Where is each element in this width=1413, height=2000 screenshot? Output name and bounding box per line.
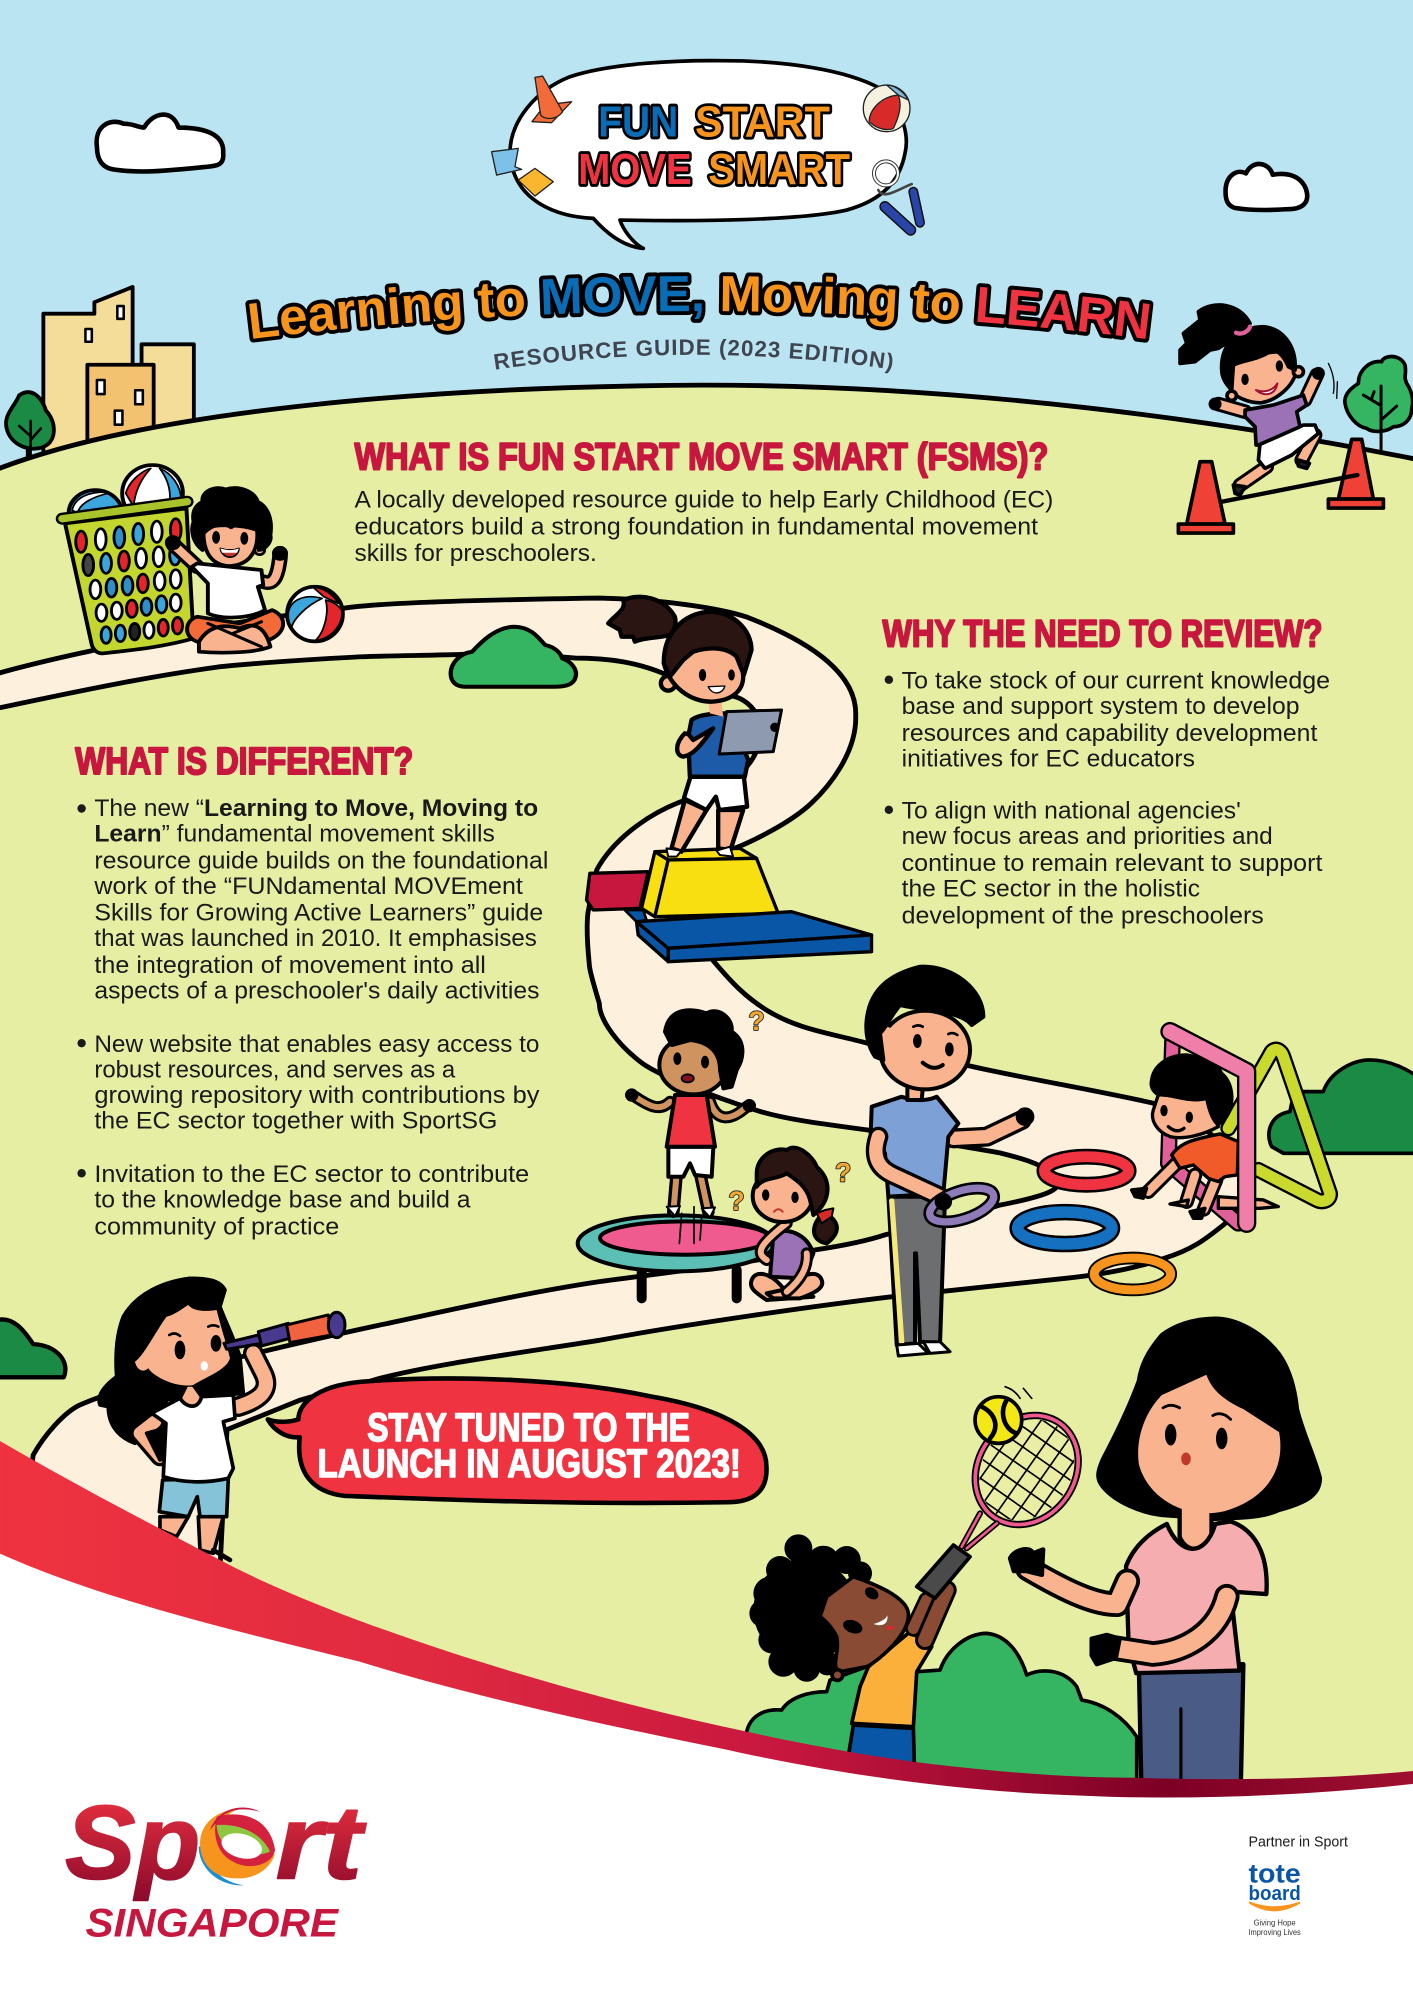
tagline: Giving Hope [1254, 1919, 1296, 1928]
tree left [6, 392, 54, 462]
logo: sport singapore [65, 1784, 367, 1945]
bullet one: work of the “FUNdamental MOVEment [93, 873, 523, 899]
teacher neck and head [907, 1082, 923, 1100]
logo text: move smart [578, 145, 850, 194]
bullet three: community of practice [94, 1213, 339, 1239]
logo text: move smart: MOVE [578, 145, 692, 194]
bullet one: Skills for Growing Active Learners” guide [94, 900, 543, 926]
face [1232, 352, 1297, 403]
hair [99, 1278, 243, 1443]
balls in basket [69, 465, 183, 537]
teacher right arm [953, 1120, 1022, 1138]
face [135, 1305, 230, 1386]
legs [672, 800, 707, 852]
blue crescent [199, 1843, 244, 1885]
face [1138, 1375, 1280, 1513]
top swish [210, 1807, 260, 1830]
bullet three: Invitation to the EC sector to contribute [94, 1161, 529, 1187]
orange band [200, 1808, 275, 1878]
blue ring [1018, 1212, 1112, 1244]
logo: partner in sport tote board [1248, 1835, 1348, 1937]
callout bubble [268, 1378, 767, 1503]
neck [1180, 1502, 1212, 1549]
hands [1010, 1549, 1120, 1664]
face details [212, 531, 220, 544]
bullet one: initiatives for EC educators [902, 745, 1195, 771]
hands [167, 537, 179, 548]
wordmark rt: rt [275, 1784, 367, 1901]
teacher shirt [871, 1097, 958, 1197]
pink frame front [1170, 1032, 1247, 1223]
child front leg [1187, 1175, 1195, 1202]
red band [215, 1814, 275, 1866]
child back leg [1218, 1197, 1278, 1208]
heading: WHAT IS DIFFERENT? [75, 740, 413, 783]
section: what is fsms [355, 435, 1053, 566]
bullet one: To take stock of our current knowledge [902, 668, 1330, 694]
floor rings [1018, 1157, 1171, 1290]
seated girl head [753, 1170, 813, 1222]
arms [174, 545, 280, 583]
neck [180, 1385, 202, 1406]
logo text: fun start: FUN [598, 98, 678, 147]
left cone [1178, 462, 1233, 533]
callout: stay tuned [268, 1378, 767, 1503]
arm holding [1112, 1597, 1227, 1654]
shoes [667, 848, 682, 857]
teacher right hand [1018, 1109, 1032, 1124]
section: why the need to review [882, 613, 1330, 928]
body text [355, 487, 1053, 566]
bullet two: development of the preschoolers [902, 902, 1264, 928]
smile [1250, 1903, 1299, 1910]
skirt [1258, 425, 1318, 468]
callout text [318, 1406, 741, 1486]
face [820, 1577, 908, 1672]
scrunchie [1236, 327, 1250, 333]
shirt [688, 713, 748, 777]
partner label: Partner in Sport [1248, 1835, 1348, 1851]
motion lines [1328, 363, 1337, 398]
yellow block [642, 848, 778, 917]
shorts [187, 610, 283, 642]
seated girl pigtail [814, 1215, 837, 1243]
purple hoop [926, 1181, 998, 1229]
face details [1241, 374, 1249, 385]
racket grip [917, 1545, 970, 1598]
shirt [1245, 395, 1307, 445]
icon: beach ball [863, 85, 910, 132]
shirt [852, 1632, 932, 1727]
sky background [0, 0, 1413, 536]
teacher shoes [897, 1342, 950, 1356]
shorts [159, 1478, 228, 1517]
section: what is different [75, 740, 548, 1239]
logo text: move smart: SMART [708, 145, 850, 194]
seated girl arms [761, 1223, 807, 1292]
tennis ball [975, 1387, 1032, 1443]
left arm [140, 1422, 160, 1457]
boy shoes [667, 1206, 715, 1217]
hair [749, 1534, 872, 1682]
face details [699, 669, 706, 681]
bullet one: Learn” fundamental movement skills [94, 821, 495, 847]
hair [664, 612, 752, 677]
racket throat [962, 1513, 997, 1548]
face features [1165, 1424, 1176, 1446]
tree right [1345, 356, 1413, 453]
racket head [972, 1412, 1082, 1528]
red ring [1044, 1157, 1129, 1185]
body text: educators build a strong foundation in fundamental movement [355, 513, 1039, 539]
board wordmark: board [1248, 1883, 1301, 1905]
tagline: Improving Lives [1248, 1928, 1301, 1937]
question mark right: ? [835, 1158, 851, 1188]
child arms [1148, 1163, 1216, 1209]
callout text: STAY TUNED TO THE [367, 1406, 690, 1450]
bullet three [77, 1161, 529, 1239]
child face [1152, 1095, 1218, 1138]
icon: yellow bean bag [518, 168, 553, 196]
red block [587, 872, 648, 910]
arm out [1028, 1569, 1127, 1604]
gym blocks and girl with tablet [587, 597, 872, 962]
ponytail [608, 597, 675, 642]
crossed legs [199, 626, 270, 653]
boy arms [635, 1097, 747, 1117]
boy vest [667, 1095, 715, 1147]
callout text: LAUNCH IN AUGUST 2023! [318, 1442, 741, 1486]
child features [1160, 1105, 1168, 1116]
cloud left [97, 115, 223, 172]
neck and arm [708, 702, 723, 717]
subtitle: resource guide: RESOURCE GUIDE (2023 EDITION) [494, 338, 892, 374]
trampoline [578, 1207, 774, 1298]
shirt [192, 563, 265, 617]
hands [1210, 399, 1220, 409]
small blue ledge [625, 910, 647, 922]
bullet two: To align with national agencies' [902, 798, 1241, 824]
bullet two [77, 1031, 540, 1134]
boy shorts [668, 1147, 713, 1177]
winding path [0, 598, 1243, 1581]
boy hands [627, 1090, 636, 1100]
icon: blue bean bag [492, 148, 522, 175]
white footer [0, 1551, 1413, 2000]
logo: fun start move smart speech bubble [492, 61, 920, 248]
green inner [217, 1825, 270, 1854]
question mark: ? [748, 1006, 765, 1036]
white hole [219, 1829, 265, 1863]
bullet one: resource guide builds on the foundational [94, 847, 548, 873]
bullet one: that was launched in 2010. It emphasises [94, 925, 537, 951]
red swoosh [0, 1437, 1413, 2000]
character: boy with basket of balls [62, 465, 343, 653]
boy legs [673, 1173, 708, 1212]
shirt [152, 1395, 235, 1482]
icon: cone [532, 76, 572, 123]
tote wordmark: tote [1248, 1858, 1301, 1888]
bullet two: New website that enables easy access to [94, 1031, 539, 1057]
orange ring [1094, 1258, 1171, 1290]
speech bubble [510, 61, 906, 248]
arms [913, 1590, 947, 1640]
tagline [1248, 1919, 1301, 1937]
bullet two: new focus areas and priorities and [902, 823, 1273, 849]
seated girl legs [751, 1274, 813, 1300]
bullet one: The new “ Learning to Move, Moving to [94, 795, 538, 821]
character: child with racket [749, 1386, 1082, 1762]
arms [1218, 375, 1317, 412]
bush behind tennis child [747, 1633, 1137, 1787]
shirt [1126, 1521, 1267, 1673]
wordmark sp: Sp [65, 1784, 200, 1901]
basket body [65, 508, 194, 653]
heading: WHAT IS FUN START MOVE SMART (FSMS)? [355, 435, 1048, 478]
telescope [224, 1312, 345, 1349]
bullet one: resources and capability development [902, 720, 1318, 746]
trousers [1139, 1664, 1243, 1785]
scene: rope kids, trampoline and teacher [578, 967, 1032, 1356]
yellow triangle frame [1228, 1050, 1330, 1201]
front leg [1240, 467, 1267, 485]
buildings [43, 287, 194, 485]
bullet one: aspects of a preschooler's daily activities [94, 978, 539, 1004]
bush left [0, 1319, 65, 1377]
hair [1098, 1319, 1320, 1519]
logo text: fun start: START [695, 98, 830, 147]
bullet two: continue to remain relevant to support [902, 850, 1323, 876]
raised arm [238, 1353, 266, 1407]
ponytail [1180, 305, 1250, 363]
bullet three: to the knowledge base and build a [94, 1187, 472, 1213]
body text: skills for preschoolers. [355, 540, 597, 566]
back leg [1302, 435, 1315, 460]
basket holes [76, 519, 183, 643]
wordmark singapore: SINGAPORE [85, 1901, 340, 1945]
shorts [684, 777, 747, 810]
character: girl with telescope [99, 1278, 345, 1560]
child hair [1151, 1055, 1232, 1125]
teacher trousers [888, 1197, 945, 1345]
bullet two: robust resources, and serves as a [94, 1057, 456, 1083]
bullet two: the EC sector together with SportSG [94, 1108, 497, 1134]
bush top [451, 627, 576, 687]
title: learning to move, moving to learn: Learning to MOVE, Moving to LEARN [245, 272, 1154, 343]
logo text: fun start [598, 98, 830, 147]
pink frame back [1168, 1037, 1238, 1223]
bullet one: base and support system to develop [902, 693, 1299, 719]
shoes [1233, 460, 1309, 495]
face details [175, 1341, 185, 1359]
bullet one [885, 668, 1330, 771]
bush right [1269, 1060, 1413, 1153]
ear [832, 1670, 843, 1680]
shorts [843, 1725, 915, 1790]
tablet [719, 710, 782, 754]
face features [863, 1585, 881, 1602]
head [661, 676, 676, 691]
heading: WHY THE NEED TO REVIEW? [882, 613, 1322, 656]
green hill [0, 385, 1413, 1824]
cloud right [1226, 164, 1307, 210]
hair [192, 488, 271, 550]
bullet two: the EC sector in the holistic [902, 876, 1200, 902]
icon: skipping rope [874, 161, 920, 230]
boy head [659, 1036, 727, 1094]
tunnel arch, triangle and crawling child [1132, 1032, 1413, 1223]
floor ball [287, 587, 343, 641]
legs [160, 1517, 223, 1553]
question marks: ? [728, 1186, 745, 1216]
basket rim [62, 502, 187, 519]
bullet one [77, 795, 548, 1004]
child hands [1132, 1188, 1205, 1218]
child shirt [1172, 1134, 1238, 1182]
shoe lace line [213, 1550, 230, 1560]
bullet two: growing repository with contributions by [94, 1082, 540, 1108]
seated girl shirt [770, 1231, 813, 1278]
hand on hip [147, 1428, 172, 1460]
body text: A locally developed resource guide to help Early Childhood (EC) [355, 487, 1053, 513]
bullet two [885, 798, 1323, 928]
ring emblem [199, 1807, 275, 1885]
character: mother [1010, 1319, 1320, 1785]
face [203, 525, 257, 566]
hair [1222, 327, 1295, 390]
character: girl hopping over cones [1178, 305, 1383, 533]
right cone and bar [1222, 439, 1383, 508]
blue mat [637, 912, 872, 962]
teacher left arm [876, 1137, 940, 1197]
bullet one: the integration of movement into all [94, 952, 486, 978]
